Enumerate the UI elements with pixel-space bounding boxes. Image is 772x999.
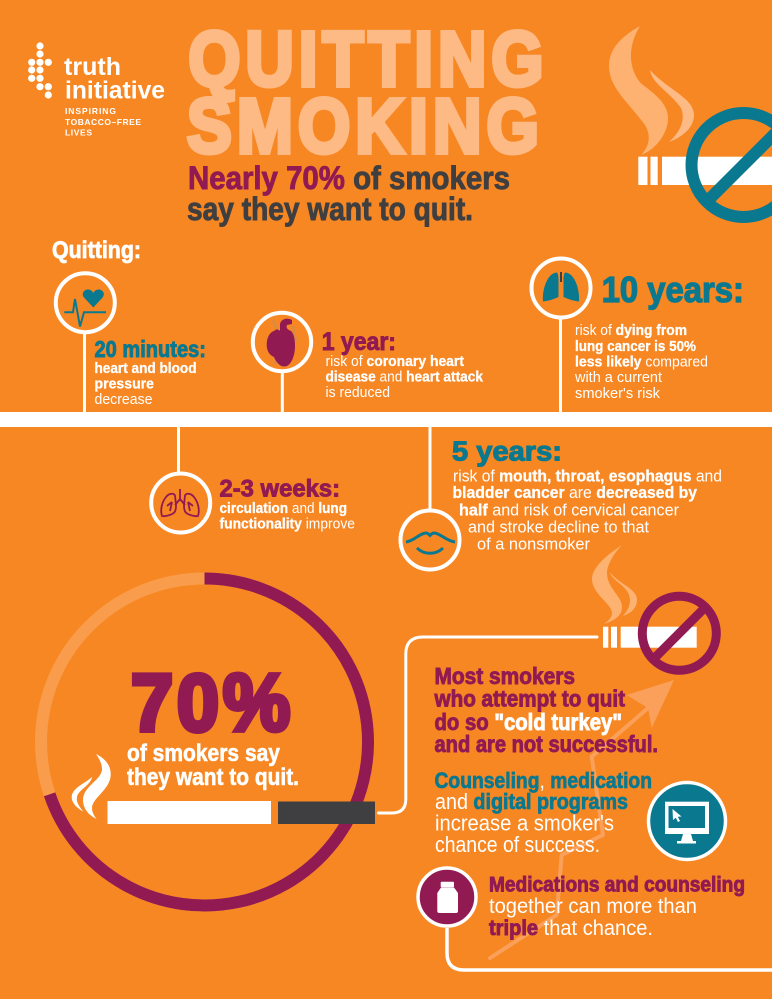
caption: of smokers say <box>127 740 281 767</box>
text: counseling and programs: increase a smoker's <box>435 811 614 836</box>
text: counseling and programs: and digital programs <box>435 789 628 814</box>
caption: they want to quit. <box>127 764 299 791</box>
logo wordmark: TOBACCO–FREE <box>65 117 141 127</box>
caption <box>127 740 299 791</box>
milestone: 10 years: risk of dying from <box>575 322 687 339</box>
milestone: 20 minutes: decrease <box>94 391 152 408</box>
icon: cigarette <box>108 801 375 824</box>
icon: heart with pulse <box>64 290 106 326</box>
logo wordmark: INSPIRING <box>65 106 116 116</box>
milestone: 5 years: half and risk of cervical cancer <box>459 502 679 520</box>
milestone: 20 minutes: 20 minutes: <box>94 336 206 362</box>
milestone: 20 minutes: pressure <box>94 376 154 393</box>
milestone: 1 year: is reduced <box>326 384 390 401</box>
logo: truth initiative <box>28 42 165 138</box>
milestone: 1 year: 1 year: <box>322 328 396 356</box>
text: medications and counseling <box>489 874 745 940</box>
milestone: 5 years: bladder cancer are decreased by <box>452 484 698 502</box>
text: counseling and programs <box>434 768 652 857</box>
subtitle: say they want to quit. <box>187 191 473 227</box>
milestone: 20 minutes: heart and blood <box>94 360 196 377</box>
milestone: 5 years <box>400 427 722 570</box>
text: cold turkey <box>434 663 658 757</box>
icon: filled lungs <box>543 272 579 302</box>
text: medications and counseling: together can more than <box>489 895 697 918</box>
text: medications and counseling: triple that chance. <box>489 917 653 940</box>
milestone: 2-3 weeks: 2-3 weeks: <box>220 476 340 503</box>
icon: lips <box>406 533 455 553</box>
milestone: 5 years: of a nonsmoker <box>477 535 590 553</box>
text: counseling and programs: chance of success. <box>435 832 600 857</box>
timeline bar <box>0 412 772 427</box>
milestone: 1 year: disease and heart attack <box>326 369 484 386</box>
logo wordmark: LIVES <box>65 128 92 138</box>
icon: logo dots <box>28 42 52 99</box>
milestone: 10 years: lung cancer is 50% <box>575 338 696 355</box>
icon: computer monitor <box>648 782 726 860</box>
connector line: bottom <box>447 928 772 970</box>
milestone: 5 years: and stroke decline to that <box>468 519 649 537</box>
milestone: 5 years: risk of mouth, throat, esophagus and <box>453 468 722 486</box>
connector line <box>378 637 597 813</box>
icon: medicine bottle <box>418 868 476 926</box>
milestone: 10 years: with a current <box>574 369 663 386</box>
statistic: 70%: 70% <box>131 658 294 748</box>
title: QUITTING <box>188 16 548 102</box>
heading: quitting: Quitting: <box>52 237 141 264</box>
title: SMOKING <box>187 84 544 170</box>
icon: anatomical heart <box>267 319 296 367</box>
milestone: 1 year: risk of coronary heart <box>326 353 464 370</box>
text: counseling and programs: Counseling, medication <box>434 768 652 793</box>
panel: 70 percent <box>41 578 375 906</box>
logo wordmark <box>64 53 165 138</box>
milestone: 2-3 weeks <box>151 427 355 533</box>
milestone: 10 years: 10 years: <box>602 269 744 310</box>
arrow: rising path <box>490 680 674 958</box>
milestone: 5 years: 5 years: <box>452 436 562 467</box>
milestone: 10 years: less likely compared <box>575 354 708 371</box>
text: cold turkey: Most smokers <box>434 663 575 689</box>
milestone: 10 years: smoker's risk <box>575 385 660 402</box>
text: cold turkey: who attempt to quit <box>434 686 625 712</box>
milestone: 2-3 weeks: circulation and lung <box>220 500 347 517</box>
text: cold turkey: and are not successful. <box>434 731 658 757</box>
milestone: 1 year <box>253 313 484 412</box>
logo wordmark: initiative <box>65 76 165 104</box>
icon: cigarette with no-smoking sign <box>609 26 772 217</box>
donut chart: 70 percent <box>41 578 368 906</box>
milestone: 10 years <box>532 258 744 412</box>
icon: small cigarette with no-smoking sign <box>592 545 716 670</box>
icon: outline lungs <box>161 489 199 516</box>
milestone: 20 minutes <box>56 273 206 412</box>
milestone: 2-3 weeks: functionality improve <box>220 516 355 533</box>
text: cold turkey: do so "cold turkey" <box>434 709 622 735</box>
title <box>187 16 548 170</box>
icon: white smoke <box>72 754 111 819</box>
logo wordmark: truth <box>64 53 121 81</box>
text: medications and counseling: Medications and counseling <box>489 874 745 897</box>
subtitle: Nearly 70% of smokers <box>188 160 510 196</box>
subtitle <box>187 160 510 227</box>
